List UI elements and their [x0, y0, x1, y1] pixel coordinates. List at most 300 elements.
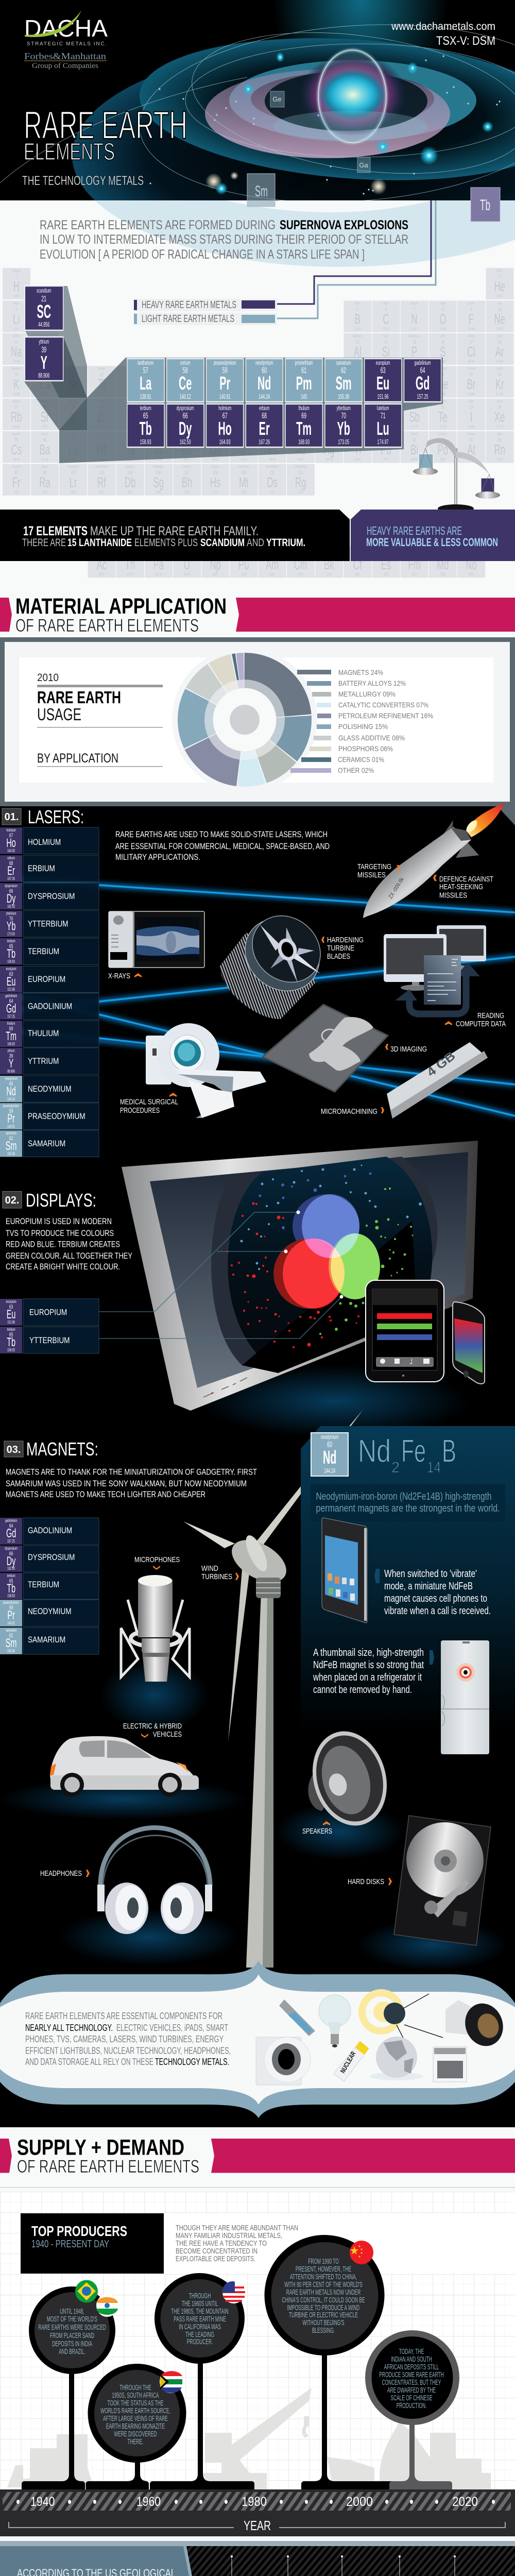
periodic table background: platinum	[268, 433, 277, 436]
enlarged scandium and yttrium cells: scandium	[37, 287, 51, 295]
enlarged lanthanide cells: cerium	[180, 360, 191, 367]
displays description: GREEN COLOUR. ALL TOGETHER THEY	[6, 1251, 132, 1261]
timeline balloon: china: RARE EARTH METALS NOW UNDER	[286, 2288, 360, 2297]
timeline balloon: united states	[150, 2273, 254, 2492]
periodic table background: 15	[413, 339, 416, 345]
periodic table background: 45	[242, 404, 246, 410]
enlarged lanthanide cells	[127, 359, 441, 447]
icon: satellite with sun rings	[358, 1989, 443, 2056]
periodic table background: 83.798	[496, 393, 503, 397]
periodic table background: beryllium	[41, 302, 49, 306]
lasers element table: dysprosium	[5, 884, 18, 888]
heading: 2010 rare earth usage: USAGE	[37, 705, 81, 724]
formula Nd2Fe14B: Fe	[401, 1433, 426, 1469]
intro paragraph: EVOLUTION [ A PERIOD OF RADICAL CHANGE IN A STARS LIFE SPAN ]	[40, 247, 365, 262]
periodic table background: magnesium	[39, 334, 50, 338]
legend: heavy and light rare earth metals: HEAVY RARE EARTH METALS	[142, 299, 236, 311]
icon: camera	[445, 1998, 509, 2052]
timeline axis	[0, 2489, 515, 2536]
periodic table background: 76	[214, 437, 217, 443]
display callout lines	[99, 1211, 343, 1338]
lasers element table: 64	[9, 998, 13, 1004]
illustration: smartphone	[366, 1280, 444, 1382]
displays element table: terbium	[7, 1328, 15, 1332]
periodic table background: 3	[15, 307, 18, 312]
enlarged lanthanide cells: thulium	[299, 405, 310, 412]
donut chart	[172, 647, 317, 792]
enlarged lanthanide cells: 168.93	[298, 439, 310, 446]
periodic table background: 8	[442, 307, 444, 312]
periodic table background: Ne	[494, 311, 505, 327]
heading: 2010 rare earth usage	[37, 672, 163, 767]
periodic table background: Mo	[152, 409, 164, 425]
callout: vibrate mode	[374, 1568, 491, 1617]
displays element table: 151.96	[7, 1320, 15, 1325]
enlarged lanthanide cells: samarium	[336, 360, 351, 367]
periodic table background: 110	[270, 470, 275, 476]
logo: Dacha Strategic Metals: DACHA	[24, 15, 108, 42]
periodic table background: 4	[44, 307, 46, 312]
periodic table background: 41	[128, 404, 132, 410]
periodic table background: technetium	[182, 400, 192, 404]
intro paragraph: RARE EARTH ELEMENTS ARE FORMED DURING	[40, 218, 276, 232]
periodic table background: indium	[354, 400, 361, 404]
intro paragraph	[40, 218, 408, 262]
periodic table background: 78.96	[440, 393, 445, 397]
periodic table background: Ra	[39, 474, 50, 490]
periodic table background: aluminium	[353, 334, 363, 338]
timeline balloon: india and brazil	[22, 2280, 118, 2492]
lasers element table: Pr	[7, 1112, 15, 1126]
periodic table background: caesium	[12, 433, 21, 436]
periodic table background: Fr	[12, 474, 21, 490]
enlarged scandium and yttrium cells: SC	[37, 302, 51, 323]
donut legend: CERAMICS 01%	[338, 755, 384, 764]
bottom banner: 17 elements: YTTRIUM.	[266, 537, 305, 549]
periodic table background: 14.007	[411, 328, 418, 331]
periodic table background: 40	[100, 404, 104, 410]
formula Nd2Fe14B	[358, 1433, 456, 1476]
timeline balloon: today: INDIAN AND SOUTH	[391, 2355, 432, 2364]
periodic table background: gold	[299, 433, 303, 436]
periodic table background: 131.29	[496, 426, 503, 429]
periodic table background: S	[440, 343, 445, 360]
enlarged lanthanide cells: 68	[262, 411, 267, 420]
enlarged lanthanide cells: 66	[183, 411, 188, 420]
label: reading computer data: READING	[477, 1011, 504, 1020]
periodic table background: Pd	[267, 409, 278, 425]
donut legend: BATTERY ALLOYS 12%	[338, 679, 406, 687]
periodic table background: 44	[214, 404, 217, 410]
periodic table background: C	[383, 311, 389, 327]
label: hard disks: HARD DISKS	[348, 1877, 384, 1886]
lasers element table: 144.24	[7, 1097, 15, 1101]
logo: Dacha Strategic Metals: Forbes&Manhattan	[24, 51, 106, 61]
periodic table background: hassium	[211, 465, 219, 469]
periodic table background: gallium	[354, 367, 361, 371]
illustration: medical scanner	[146, 1023, 266, 1118]
periodic table background: iodine	[468, 400, 474, 404]
periodic table background: Es	[381, 556, 391, 572]
periodic table background: manganese	[181, 367, 193, 371]
magnets element table: 66	[9, 1550, 13, 1556]
periodic table background: Cu	[295, 376, 306, 392]
periodic table background: radium	[42, 465, 48, 469]
periodic table background: Pa	[153, 556, 164, 572]
icon: thermometer	[279, 1999, 315, 2036]
periodic table background: 31	[356, 372, 359, 378]
enlarged lanthanide cells: Yb	[337, 419, 350, 439]
periodic table background: chromium	[154, 367, 163, 371]
periodic table background: 47	[299, 404, 302, 410]
periodic table background: P	[411, 343, 417, 360]
timeline balloon: india and brazil: UNTIL 1948,	[60, 2307, 84, 2316]
periodic table background: 72	[100, 437, 104, 443]
labels: targeting and defence missiles: DEFENCE AGAINST	[439, 875, 493, 884]
lasers element table: 158.93	[7, 960, 15, 964]
enlarged lanthanide cells: ytterbium	[337, 405, 351, 412]
periodic table background: cadmium	[324, 400, 334, 404]
timeline balloon: south africa: AFTER LARGE VEINS OF RARE	[103, 2414, 168, 2423]
timeline balloon: china: WITH 90 PER CENT OF THE WORLD'S	[284, 2280, 363, 2289]
donut legend: MAGNETS 24%	[338, 668, 383, 676]
periodic table background: 71	[72, 437, 75, 443]
timeline balloon: india and brazil: RARE EARTHS WERE SOURCED	[38, 2323, 106, 2332]
periodic table background: scandium	[68, 367, 78, 371]
periodic table background: Te	[438, 409, 448, 425]
illustration: 4GB memory module: 4 GB	[424, 1049, 458, 1079]
periodic table background: silicon	[383, 334, 389, 338]
label: hardening turbine blades	[321, 936, 364, 961]
flag: china	[350, 2241, 373, 2264]
timeline balloon: today: AFRICAN DEPOSITS STILL	[384, 2363, 439, 2371]
periodic table background: lithium	[13, 302, 20, 306]
periodic table background: 32.065	[439, 360, 446, 364]
enlarged lanthanide cells: promethium	[295, 360, 313, 367]
lasers element table: 164.93	[7, 849, 15, 853]
timeline axis: 1980	[242, 2495, 267, 2509]
enlarged scandium and yttrium cells: 88.906	[38, 372, 49, 380]
periodic table background: 7	[414, 307, 416, 312]
lasers element table: 157.25	[7, 1014, 15, 1019]
lasers element table: TERBIUM	[28, 947, 59, 956]
periodic table background: 50	[384, 404, 388, 410]
timeline balloon: today: PRODUCE SOME RARE EARTH	[379, 2370, 444, 2379]
bottom banner: 17 elements: AND	[247, 537, 264, 549]
label: reading computer data	[445, 1011, 506, 1028]
periodic table background: 48	[328, 404, 331, 410]
periodic table background: barium	[42, 433, 48, 436]
periodic table background: 88	[43, 470, 47, 476]
periodic table background: 51.996	[155, 393, 162, 397]
icon: nuclear battery	[334, 2041, 369, 2081]
enlarged scandium and yttrium cells: 21	[41, 294, 46, 303]
lasers element table: Gd	[6, 1002, 16, 1016]
periodic table background: Tl	[354, 442, 361, 457]
neodymium cell	[311, 1433, 348, 1476]
periodic table background: 12	[43, 339, 47, 345]
periodic table background: 32	[384, 372, 388, 378]
periodic table background: cobalt	[241, 367, 247, 371]
lasers element table: holmium	[7, 828, 16, 833]
logo: Dacha Strategic Metals	[24, 10, 108, 70]
periodic table background: 88.906	[70, 426, 77, 429]
periodic table background: 24.305	[42, 360, 48, 364]
callout: refrigerator magnet: A thumbnail size, high-strength	[313, 1647, 424, 1658]
magnets element table: dysprosium	[5, 1547, 18, 1551]
label: micromachining: MICROMACHINING	[321, 1107, 377, 1116]
periodic table background: Am	[266, 556, 279, 572]
illustration: android phone	[322, 1518, 367, 1623]
flag: brazil	[75, 2280, 98, 2303]
periodic table background: 83	[413, 437, 416, 443]
periodic table background: 16	[441, 339, 444, 345]
illustration: computers	[384, 925, 486, 1014]
section 03 magnets heading: MAGNETS:	[26, 1438, 98, 1460]
lasers element table: 167.26	[7, 877, 15, 881]
periodic table background: mercury	[325, 433, 333, 436]
periodic table background: tin	[385, 400, 387, 404]
machinery silhouettes	[7, 2388, 491, 2489]
enlarged lanthanide cells: Lu	[377, 419, 389, 439]
magnets description: SAMARIUM WAS USED IN THE SONY WALKMAN, BUT NOW NEODYMIUM	[6, 1479, 247, 1488]
lasers element table: 162.50	[7, 905, 15, 909]
heading: 2010 rare earth usage: BY APPLICATION	[37, 751, 118, 766]
periodic table background: Cs	[11, 442, 22, 457]
periodic table background: 127.60	[439, 426, 446, 429]
periodic table background: 18	[498, 339, 502, 345]
periodic table background: [222]	[497, 458, 502, 462]
lasers element table: 150.36	[7, 1152, 15, 1156]
header links: TSX-V: DSM	[436, 34, 495, 48]
enlarged lanthanide cells: europium	[376, 360, 390, 367]
periodic table background: Sc	[68, 376, 78, 392]
lasers element table: Er	[7, 864, 15, 878]
text: technology metals: AND DATA STORAGE ALL RELY ON THESE	[25, 2057, 153, 2067]
periodic table background: [210]	[469, 458, 474, 462]
timeline balloon: united states: THE LEADING	[185, 2330, 214, 2339]
text: technology metals: ELECTRIC VEHICLES, iPADS, SMART	[116, 2023, 228, 2033]
enlarged lanthanide cells: gadolinium	[415, 360, 431, 367]
periodic table background: 109	[241, 470, 247, 476]
logo: Dacha Strategic Metals: Group of Companies	[32, 62, 98, 70]
lasers element table: 66	[9, 888, 13, 894]
magnets element table: Sm	[6, 1636, 16, 1650]
periodic table background: calcium	[41, 367, 48, 371]
displays element table: 65	[9, 1331, 13, 1337]
periodic table background: 77	[242, 437, 246, 443]
periodic table background: 132.91	[13, 458, 20, 462]
lasers element table: SAMARIUM	[28, 1139, 65, 1148]
enlarged lanthanide cells: neodymium	[255, 360, 273, 367]
periodic table background: 9	[470, 307, 472, 312]
label: speakers	[302, 1821, 332, 1836]
formula Nd2Fe14B: 2	[391, 1459, 400, 1476]
labels: targeting and defence missiles: HEAT-SEEKING	[439, 883, 483, 891]
periodic table background: Se	[438, 376, 448, 392]
illustration: car	[0, 1736, 247, 1820]
periodic table background: Sg	[153, 474, 164, 490]
section 03 magnets heading: 03.	[7, 1444, 21, 1455]
periodic table background: Au	[296, 442, 306, 457]
periodic table background: 42	[157, 404, 160, 410]
periodic table background: 43	[185, 404, 189, 410]
periodic table background: U	[184, 556, 190, 572]
displays description	[6, 1216, 132, 1272]
periodic table background: Xe	[494, 409, 505, 425]
enlarged lanthanide cells: Pm	[296, 374, 312, 394]
top producers note: THE REE HAVE A TENDENCY TO	[176, 2239, 267, 2248]
periodic table background: 104	[99, 470, 105, 476]
lasers element table: DYSPROSIUM	[28, 892, 75, 901]
RGB overlapping circles	[273, 1194, 380, 1309]
bottom banner: 17 elements: 17 ELEMENTS	[23, 524, 88, 538]
periodic table background: N	[411, 311, 418, 327]
top producers note: BECOME CONCENTRATED IN	[176, 2247, 258, 2256]
enlarged lanthanide cells: Tb	[140, 419, 152, 439]
periodic table background: 74.922	[411, 393, 418, 397]
enlarged lanthanide cells: 150.36	[338, 394, 349, 401]
periodic table background: 186.21	[184, 458, 190, 462]
periodic table background: [226]	[42, 491, 47, 495]
formula description	[311, 1484, 505, 1522]
periodic table background: At	[467, 442, 475, 457]
illustration: speaker	[276, 1722, 404, 1860]
periodic table background: selenium	[438, 367, 447, 371]
enlarged lanthanide cells: Er	[259, 419, 270, 439]
periodic table background: Y	[71, 409, 76, 425]
periodic table background: 14	[384, 339, 388, 345]
periodic table background: 26.982	[354, 360, 361, 364]
periodic table background: tantalum	[126, 433, 134, 436]
periodic table background: 30.974	[411, 360, 418, 364]
displays element table: EUROPIUM	[29, 1308, 67, 1317]
periodic table background: Ag	[296, 409, 306, 425]
periodic table background: 4.0026	[496, 295, 503, 298]
lasers element table: 69	[9, 1025, 13, 1031]
lasers description	[115, 829, 330, 862]
periodic table background: 52	[441, 404, 444, 410]
periodic table background: 105	[128, 470, 133, 476]
periodic table background: silver	[298, 400, 303, 404]
timeline balloon: china	[265, 2235, 399, 2492]
periodic table background: 208.98	[411, 458, 418, 462]
displays element table: 158.93	[7, 1348, 15, 1352]
legend: heavy and light rare earth metals: LIGHT RARE EARTH METALS	[142, 313, 234, 325]
timeline balloon: china: WITHOUT BEIJING'S	[302, 2318, 345, 2327]
icon: balance scale	[413, 438, 500, 516]
lasers element table: Nd	[6, 1084, 16, 1098]
illustration: turbine	[220, 902, 334, 1019]
top producers title box	[21, 2213, 164, 2274]
periodic table background: 78	[270, 437, 274, 443]
labels: microphones and wind turbines: MICROPHONES	[134, 1555, 180, 1564]
periodic table background: 231.04	[155, 573, 162, 577]
enlarged lanthanide cells: Gd	[416, 374, 430, 394]
periodic table background: Sn	[381, 409, 391, 425]
displays element table: europium	[6, 1300, 16, 1304]
periodic table background: 91.224	[98, 426, 105, 429]
periodic table background: dubnium	[126, 465, 134, 469]
periodic table background: Cf	[353, 556, 362, 572]
timeline balloon: today	[365, 2330, 459, 2492]
periodic table background: [251]	[355, 573, 360, 577]
enlarged lanthanide cells: lutetium	[377, 405, 389, 412]
illustration: microphone	[100, 1575, 209, 1731]
faded element tiles floating in the nebula: Tb	[480, 197, 490, 214]
periodic table background: 10.811	[354, 328, 360, 331]
periodic table background: 35	[470, 372, 473, 378]
periodic table background: Ta	[126, 442, 135, 457]
periodic table background: Os	[210, 442, 221, 457]
periodic table background: Hf	[97, 442, 106, 457]
bottom banner: 17 elements: THERE ARE	[22, 537, 66, 549]
timeline balloon: today: ARE DWARFED BY THE	[387, 2386, 436, 2395]
periodic table background: As	[409, 376, 419, 392]
bottom banner: 17 elements: ELEMENTS PLUS	[134, 537, 198, 549]
labels: microphones and wind turbines: WIND	[201, 1564, 218, 1573]
periodic table background: 51	[413, 404, 416, 410]
periodic table background: zirconium	[97, 400, 107, 404]
timeline balloon: china: BLESSING.	[312, 2326, 335, 2335]
lasers element table: 59	[9, 1108, 13, 1114]
timeline balloon: united states: THE 1960S UNTIL	[182, 2299, 218, 2308]
magnets element table: 162.50	[7, 1567, 15, 1571]
illustration: iphone	[453, 1302, 485, 1384]
heading: 2010 rare earth usage: 2010	[37, 672, 59, 684]
periodic table background: 36	[498, 372, 502, 378]
top producers note	[176, 2224, 298, 2263]
top producers title box: TOP PRODUCERS	[31, 2223, 127, 2239]
formula Nd2Fe14B: Nd	[358, 1433, 391, 1469]
periodic table background: B	[355, 311, 360, 327]
periodic table background: rutherfordium	[95, 465, 108, 469]
periodic table background: argon	[497, 334, 503, 338]
text: technology metals: PHONES, TVS, CAMERAS, LASERS, WIND TURBINES, ENERGY	[25, 2034, 224, 2044]
periodic table background: 11	[15, 339, 18, 345]
periodic table background: 39	[72, 404, 75, 410]
periodic table background: 108	[213, 470, 218, 476]
illustration: wind turbine	[183, 1410, 363, 1968]
lasers element table: NEODYMIUM	[28, 1084, 72, 1094]
periodic table background: 56	[43, 437, 47, 443]
lasers description: RARE EARTHS ARE USED TO MAKE SOLID-STATE LASERS, WHICH	[115, 829, 328, 839]
periodic table background: [243]	[270, 573, 275, 577]
enlarged lanthanide cells: 63	[381, 365, 385, 375]
periodic table background: 207.2	[383, 458, 389, 462]
periodic table background: Al	[354, 343, 362, 360]
timeline balloon: united states: THE 1980S, THE MOUNTAIN	[171, 2307, 229, 2316]
displays element table: YTTERBIUM	[29, 1336, 70, 1345]
periodic table background: antimony	[410, 400, 419, 404]
periodic table background: 195.08	[269, 458, 276, 462]
periodic table background: No	[466, 556, 477, 572]
lasers element table: 68	[9, 860, 13, 866]
lasers element table: ytterbium	[6, 911, 16, 916]
periodic table background: fluorine	[468, 302, 475, 306]
title: RARE EARTH	[24, 104, 187, 147]
heading: 2010 rare earth usage: RARE EARTH	[37, 688, 121, 707]
periodic table background: Co	[238, 376, 249, 392]
illustration: headphones	[59, 1828, 239, 1965]
periodic table background: neon	[497, 302, 502, 306]
faded element tiles floating in the nebula	[247, 91, 500, 222]
enlarged lanthanide cells: Nd	[258, 374, 271, 394]
timeline balloon: south africa: WERE DISCOVERED	[114, 2430, 157, 2438]
periodic table background: 137.33	[42, 458, 48, 462]
periodic table background: 24	[157, 372, 160, 378]
lasers element table: Sm	[6, 1139, 16, 1153]
